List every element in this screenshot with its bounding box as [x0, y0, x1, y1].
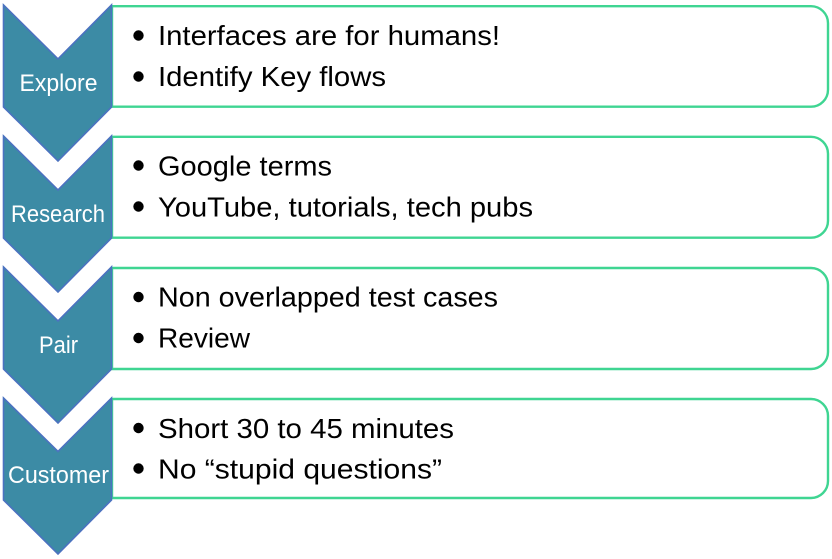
icon: Customer chevron: [4, 398, 112, 554]
label: Customer: Customer: [8, 462, 109, 489]
panel: Research text box: [112, 137, 828, 238]
bullet list: Pair: Review: [158, 322, 251, 354]
label: Pair: Pair: [39, 332, 78, 359]
label: Research: Research: [11, 201, 105, 228]
row: Research: [4, 136, 828, 292]
row: Explore: [4, 5, 828, 161]
row: Pair: [4, 267, 828, 423]
icon: Explore chevron: [4, 5, 112, 161]
row: Customer: [4, 398, 828, 554]
bullet list: Customer: [133, 413, 454, 484]
bullet list: Explore: Interfaces are for humans!: [158, 20, 500, 51]
bullet list: Explore: [133, 20, 500, 92]
panel: Explore text box: [112, 6, 828, 107]
bullet list: Customer: No “stupid questions”: [158, 454, 442, 484]
panel: Pair text box: [112, 268, 828, 369]
panel: Customer text box: [112, 399, 828, 498]
bullet list: Research: Google terms: [158, 150, 332, 182]
bullet list: Research: YouTube, tutorials, tech pubs: [158, 192, 533, 222]
bullet list: Explore: Identify Key flows: [158, 61, 386, 92]
bullet list: Research: [133, 150, 533, 222]
bullet list: Pair: Non overlapped test cases: [158, 282, 498, 312]
label: Explore: Explore: [20, 70, 98, 97]
bullet list: Pair: [133, 282, 498, 354]
icon: Pair chevron: [4, 267, 112, 423]
bullet list: Customer: Short 30 to 45 minutes: [158, 413, 454, 444]
icon: Research chevron: [4, 136, 112, 292]
